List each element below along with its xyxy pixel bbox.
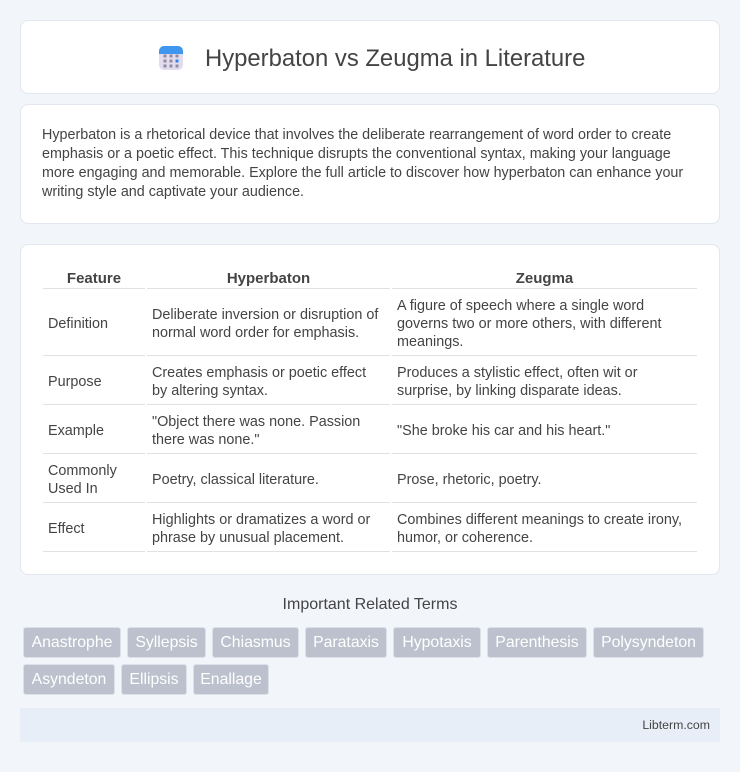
tag: Parataxis: Parataxis <box>313 634 379 651</box>
table header: Feature: Feature <box>67 270 121 287</box>
tag: Enallage: Enallage <box>200 671 262 688</box>
tag: Hypotaxis <box>393 627 481 658</box>
row: Commonly Used In <box>48 463 542 497</box>
icon: calendar <box>159 46 183 70</box>
row: Purpose: Purpose <box>48 374 102 390</box>
row: Purpose: surprise, by linking disparate ideas. <box>397 383 622 399</box>
row: Example: there was none." <box>152 432 260 448</box>
row: Purpose: Produces a stylistic effect, often wit or <box>397 365 637 381</box>
tag: Syllepsis: Syllepsis <box>135 634 198 651</box>
row: Effect <box>48 512 682 546</box>
tag: Polysyndeton <box>593 627 704 658</box>
row: Definition: A figure of speech where a single word <box>397 298 644 314</box>
row: Effect: Effect <box>48 521 85 537</box>
tag: Ellipsis: Ellipsis <box>129 671 179 688</box>
row: Commonly Used In: Poetry, classical literature. <box>152 472 319 488</box>
row: Definition: Deliberate inversion or disruption of <box>152 307 378 323</box>
tag: Syllepsis <box>127 627 206 658</box>
related term tags <box>23 627 704 695</box>
intro text: writing style and captivate your audience. <box>42 184 304 200</box>
tag: Chiasmus: Chiasmus <box>220 634 291 651</box>
intro text: emphasis or a poetic effect. This technique disrupts the conventional syntax, making your language <box>42 146 671 162</box>
row: Commonly Used In: Prose, rhetoric, poetry. <box>397 472 542 488</box>
row: Commonly Used In: Commonly <box>48 463 117 479</box>
row: Effect: Highlights or dramatizes a word or <box>152 512 370 528</box>
table header: Zeugma: Zeugma <box>516 270 573 287</box>
intro panel <box>20 104 720 224</box>
tag: Ellipsis <box>121 664 187 695</box>
tag: Chiasmus <box>212 627 299 658</box>
row: Effect: phrase by unusual placement. <box>152 530 344 546</box>
row: Purpose: by altering syntax. <box>152 383 268 399</box>
tag: Polysyndeton: Polysyndeton <box>601 634 696 651</box>
row: Definition: governs two or more others, with different <box>397 316 661 332</box>
title: Hyperbaton vs Zeugma in Literature <box>205 45 585 72</box>
tag: Parenthesis: Parenthesis <box>495 634 579 651</box>
row: Effect: Combines different meanings to create irony, <box>397 512 682 528</box>
row: Definition: normal word order for emphasis. <box>152 325 359 341</box>
table header: Hyperbaton: Hyperbaton <box>227 270 310 287</box>
footer bar <box>20 708 720 742</box>
row: Definition <box>48 298 662 350</box>
table panel <box>20 244 720 575</box>
tag: Hypotaxis: Hypotaxis <box>402 634 472 651</box>
row: Definition: meanings. <box>397 334 463 350</box>
row: Definition: Definition <box>48 316 108 332</box>
row: Example: "Object there was none. Passion <box>152 414 360 430</box>
intro text: more engaging and memorable. Explore the full article to discover how hyperbaton can enhance your <box>42 165 683 181</box>
row: Purpose <box>48 365 638 399</box>
related terms heading: Important Related Terms <box>283 596 457 613</box>
tag: Parenthesis <box>487 627 587 658</box>
comparison table <box>43 270 697 552</box>
footer credit: Libterm.com <box>642 718 710 732</box>
row: Commonly Used In: Used In <box>48 481 98 497</box>
tag: Anastrophe: Anastrophe <box>32 634 112 651</box>
row: Purpose: Creates emphasis or poetic effect <box>152 365 366 381</box>
tag: Anastrophe <box>23 627 121 658</box>
row: Effect: humor, or coherence. <box>397 530 533 546</box>
intro text <box>42 127 683 200</box>
tag: Asyndeton <box>23 664 115 695</box>
intro text: Hyperbaton is a rhetorical device that involves the deliberate rearrangement of word order to create <box>42 127 671 143</box>
tag: Enallage <box>193 664 269 695</box>
row: Example <box>48 414 610 448</box>
header panel <box>20 20 720 94</box>
tag: Asyndeton: Asyndeton <box>32 671 106 688</box>
tag: Parataxis <box>305 627 387 658</box>
row: Example: "She broke his car and his heart." <box>397 423 610 439</box>
row: Example: Example <box>48 423 104 439</box>
